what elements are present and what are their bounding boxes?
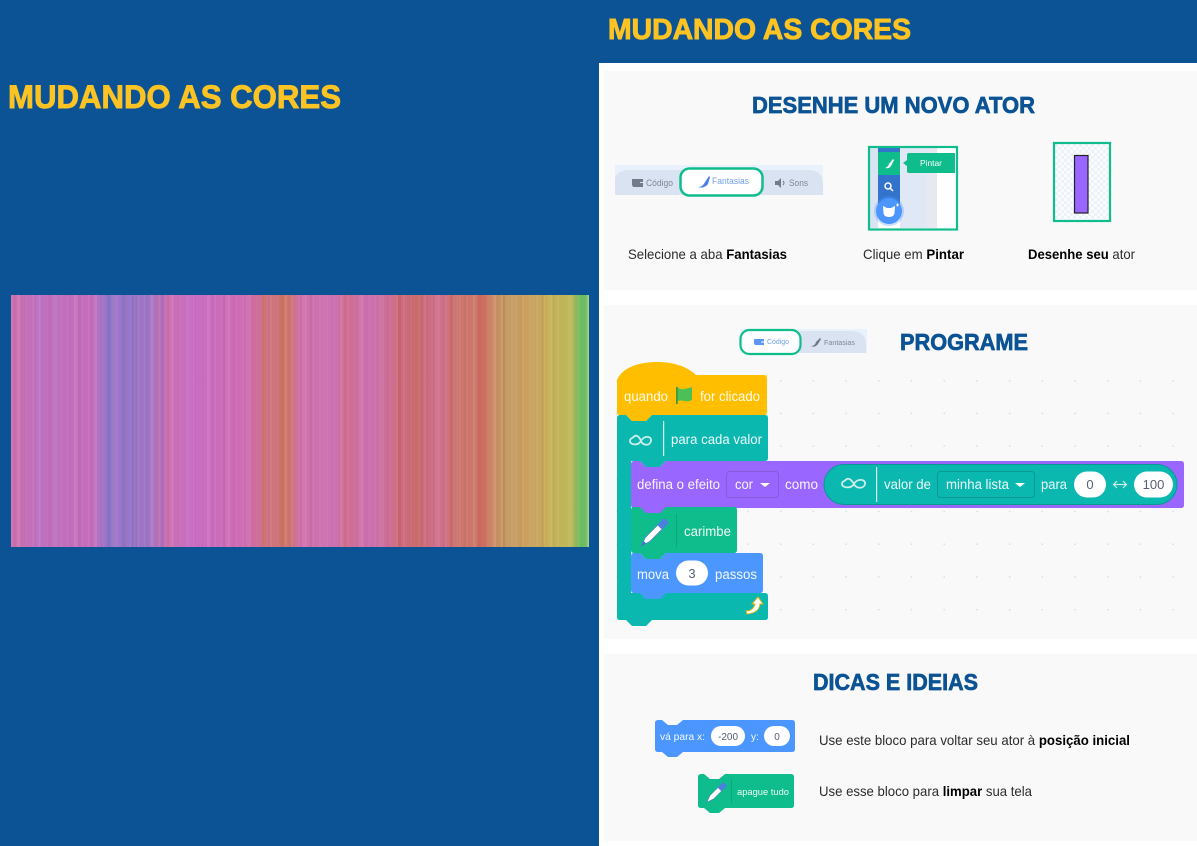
block: stamp bbox=[631, 507, 737, 559]
tip text: clear screen: Use esse bloco para limpar sua tela bbox=[819, 783, 1032, 799]
heading: tips: DICAS E IDEIAS bbox=[813, 669, 978, 695]
block: move steps: passos bbox=[715, 567, 757, 582]
left panel background bbox=[0, 0, 599, 846]
code tab bbox=[740, 329, 867, 354]
step: click paint: Pintar bbox=[920, 158, 942, 168]
right column background bbox=[599, 63, 1197, 846]
block: stamp: carimbe bbox=[684, 524, 731, 539]
step: select costumes tab: Sons bbox=[789, 178, 808, 188]
step: select costumes tab bbox=[615, 165, 823, 262]
tip text: go to start: Use este bloco para voltar seu ator à posição inicial bbox=[819, 732, 1130, 748]
block: go to x y: -200 bbox=[718, 732, 738, 743]
step: click paint bbox=[863, 147, 965, 262]
left title: MUDANDO AS CORES bbox=[8, 79, 341, 115]
panel: program bbox=[604, 305, 1197, 639]
block: set colour effect bbox=[631, 461, 1184, 514]
block: set colour effect: como bbox=[785, 477, 818, 492]
heading: program: PROGRAME bbox=[900, 329, 1028, 355]
step: click paint: Clique em Pintar bbox=[863, 246, 965, 262]
block: move steps: mova bbox=[637, 567, 669, 582]
reporter: list value: 100 bbox=[1143, 477, 1164, 492]
step: select costumes tab: Fantasias bbox=[712, 176, 749, 186]
panel: tips and ideas bbox=[604, 654, 1197, 841]
reporter: list value bbox=[824, 464, 1177, 504]
reporter: list value: 0 bbox=[1086, 477, 1094, 492]
icon: range arrow bbox=[1114, 481, 1126, 488]
block: for each loop bbox=[617, 415, 768, 626]
block: move steps: 3 bbox=[688, 566, 696, 581]
right title: MUDANDO AS CORES bbox=[608, 14, 911, 46]
heading: draw sprite: DESENHE UM NOVO ATOR bbox=[752, 92, 1035, 118]
block: erase all bbox=[698, 774, 794, 813]
striped colour chart bbox=[11, 295, 589, 547]
block: set colour effect: cor bbox=[735, 477, 753, 492]
code tab: Fantasias bbox=[824, 338, 855, 347]
code tab: Código bbox=[767, 337, 789, 346]
reporter: list value: valor de bbox=[884, 477, 931, 492]
step: select costumes tab: Código bbox=[646, 178, 673, 188]
right header band bbox=[599, 0, 1197, 63]
reporter: list value: para bbox=[1041, 477, 1067, 492]
block: go to x y: 0 bbox=[774, 732, 780, 743]
block: go to x y: vá para x: bbox=[660, 732, 705, 743]
reporter: list value: minha lista bbox=[946, 477, 1009, 492]
step: select costumes tab: Selecione a aba Fantasias bbox=[628, 246, 787, 262]
block: set colour effect: defina o efeito bbox=[637, 477, 720, 492]
block: move steps bbox=[631, 553, 763, 599]
block: when flag clicked: quando bbox=[624, 389, 668, 404]
block: for each loop: para cada valor bbox=[671, 432, 762, 447]
step: draw sprite bbox=[1028, 143, 1135, 262]
block: go to x y bbox=[655, 720, 795, 757]
block: when flag clicked bbox=[617, 362, 767, 421]
block: go to x y: y: bbox=[751, 732, 759, 743]
block: erase all: apague tudo bbox=[737, 787, 789, 798]
icon: pen bbox=[639, 518, 669, 548]
block: when flag clicked: for clicado bbox=[700, 389, 760, 404]
step: draw sprite: Desenhe seu ator bbox=[1028, 246, 1135, 262]
panel: draw a new sprite bbox=[604, 71, 1197, 290]
